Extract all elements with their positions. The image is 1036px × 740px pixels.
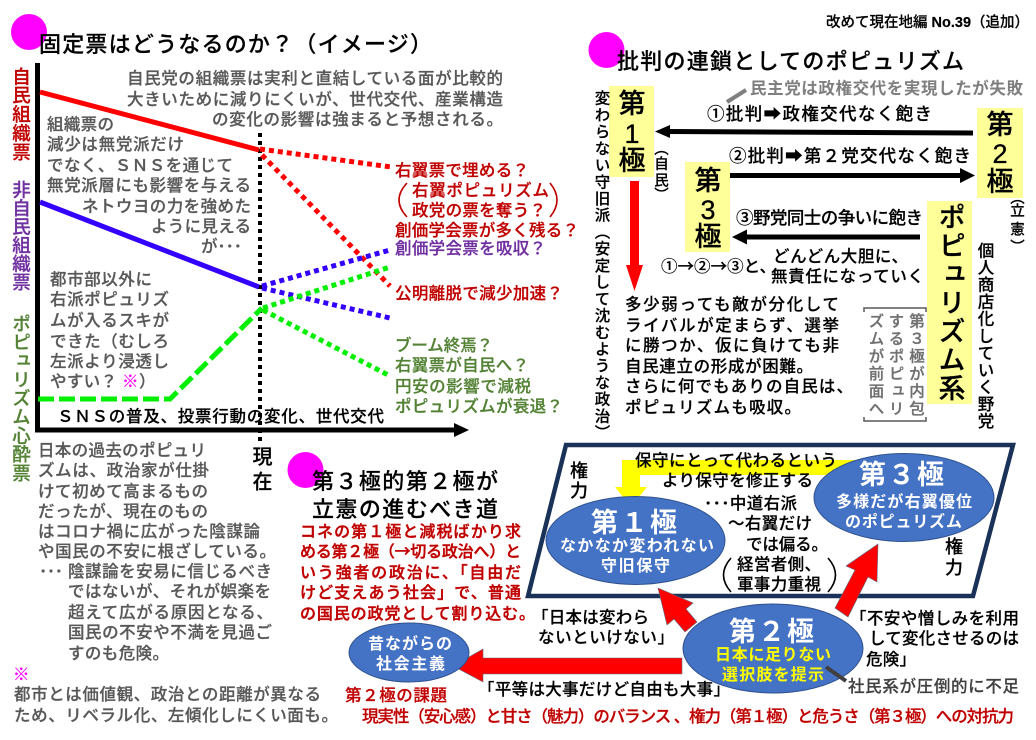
text: urban populism note: ） [139,372,156,391]
text: strategy in red: いう強者の政治に、「自由だ [300,564,521,582]
text: past populism in Japan: すのも危険。 [68,644,169,663]
panel: chain of criticism [588,14,1029,440]
note: third pole populism in bracket: ズムが前面へ [866,313,884,416]
text: strategy in red: める第２極（→切る政治へ）と [300,538,521,562]
box: second pole: 第 [986,110,1014,140]
note: third pole populism in bracket [864,308,926,421]
labels: red line scenarios: 右翼ポピュリズム [412,180,549,200]
text: center right note: ～右翼だけ [728,514,812,533]
text: center right note: 軍事力重視 [737,575,822,594]
text: first pole advantage [625,294,853,417]
quote: do not exploit anxiety: 危険」 [866,650,916,669]
text: decline of organised vote: ように見える [151,217,251,236]
text: urban populism note: 左派より浸透し [50,352,169,371]
box: third pole: 極 [694,222,722,252]
labels: green line scenarios: 円安の影響で減税 [395,377,532,396]
quote: Japan must change: 「日本は変わら [532,608,649,627]
ellipse: second pole: 日本に足りない [715,646,831,664]
text: challenges detail: 現実性（安心感）と甘さ（魅力）のバランス 、権力（第１極）と危うさ（第３極）への対抗力 [362,707,1014,726]
text: past populism in Japan: ･･･ [39,563,63,581]
box: second pole: 極 [986,167,1014,197]
label: absorb Soka vote: 創価学会票を吸収？ [395,239,546,258]
footnote: urban values: 都市とは価値観、政治との距離が異なる [14,684,321,704]
text: decline of organised vote: 無党派層にも影響を与える [47,176,251,195]
footnote: urban values: ※ [13,666,30,684]
text: past populism in Japan: ズムは、政治家が仕掛 [38,460,210,480]
annotation: lack of social democrats: 社民系が圧倒的に不足 [848,676,1019,696]
text: urban populism note: 右派ポピュリズ [50,289,169,309]
ellipse: second pole: 第２極 [729,617,814,647]
footnote: urban values: ため、リベラル化、左傾化しにくい面も。 [14,706,338,725]
text: urban populism note: やすい？ [50,372,117,391]
text: escalation: ①→②→③と、 [661,253,776,277]
ellipse: third pole: のポピュリズム [845,512,962,531]
ellipse: first pole [546,496,725,584]
text: first pole advantage: 自民連立の形成が困難。 [625,356,813,376]
box: third pole: 第 [694,166,722,196]
chart: lines and axes [35,63,469,445]
text: first pole advantage: ポピュリズムも吸収。 [625,397,801,417]
arrow: second pole to old socialism [453,649,682,682]
box: second pole: 2 [992,139,1008,169]
header note: series number: 改めて現在地編 No.39（追加） [826,14,1029,31]
labels: red line scenarios: 創価学会票が多く残る？ [395,220,579,240]
ellipse: third pole: 多様だが右翼優位 [836,492,972,511]
box: first pole [609,86,654,177]
vertical text: LDP: 自民 [652,156,668,187]
arrow 3: populists to third pole [732,208,923,244]
text: axis caption: ＳＮＳの普及、投票行動の変化、世代交代 [57,407,384,426]
text: decline of organised vote: でなく、ＳＮＳを通じて [47,156,233,175]
text: past populism in Japan: 国民の不安や不満を見過ご [68,623,272,642]
title: path for CDP [312,469,498,522]
diagram: power parallelogram [528,445,1013,596]
labels: red line scenarios: 右翼票で埋める？ [395,161,529,180]
label: power left: 権力 [568,461,588,499]
label: power right: 権力 [943,537,963,576]
text: LDP organised vote note [127,68,503,129]
labels: green line scenarios: 右翼票が自民へ？ [395,355,529,375]
labels: green line scenarios [395,335,563,416]
arrow: second pole to third pole [835,544,878,617]
text: LDP organised vote note: 自民党の組織票は実利と直結している面が比較的 [127,68,503,88]
text: first pole advantage: 多少弱っても敵が分化して [625,294,839,314]
label: now: 現在 [249,446,272,491]
title: populism as chain of criticism: 批判の連鎖としてのポピュリズム [617,49,964,74]
vertical text: CDP: （ [1008,190,1024,205]
ellipse: first pole: 第１極 [591,508,677,538]
text: correction from conservatives: より保守を修正する [662,471,813,490]
marker: section 2 circle [588,32,624,68]
box: third pole [685,162,730,252]
quote: Japan must change: ないといけない」 [538,628,674,647]
vertical text: LDP: ） [652,187,668,202]
labels: green line scenarios: ブーム終焉？ [395,335,493,355]
arrow 1: second pole to first pole [655,104,973,138]
text: escalation: 無責任になっていく [771,267,924,286]
text: first pole advantage: さらに何でもありの自民は、 [625,377,853,396]
labels: red line scenarios: 政党の票を奪う？ [412,201,546,220]
ellipse: third pole: 第３極 [859,460,944,490]
text: past populism in Japan: 超えて広がる原因となる、 [68,602,273,622]
quote: equality and freedom: 「平等は大事だけど自由も大事」 [478,680,730,699]
box: populist group: ポピュリズム系 [934,203,965,401]
text: first pole advantage: に勝つか、仮に負けても非 [625,336,839,355]
quote: do not exploit anxiety: 「不安や憎しみを利用 [850,609,1019,628]
arrow 2: third pole to second pole: ②批判➡第２党交代なく飽き [729,146,971,166]
vertical text: LDP: （ [652,141,668,156]
ellipse: old socialism [349,623,469,682]
text: decline of organised vote: ネトウヨの力を強めた [82,197,251,216]
text: past populism in Japan: 日本の過去のポピュリ [38,441,206,460]
vertical text: LDP [652,141,668,202]
text: urban populism note: 都市部以外に [50,270,152,289]
frame: parallelogram [528,445,1013,596]
quote: do not exploit anxiety [850,609,1019,669]
box: second pole [977,108,1023,198]
heading: second pole challenges: 第２極の課題 [345,686,448,705]
vertical text: CDP: 立憲 [1008,203,1024,236]
axis label: populism supporters: ポピュリズム心酔票 [10,314,32,482]
arrow 3: populists to third pole: ③野党同士の争いに飽き [736,208,923,228]
title: path for CDP: 第３極的第２極が [312,469,498,494]
arrow: first pole sinking [626,181,643,291]
vertical text: CDP: ） [1008,239,1024,254]
text: decline of organised vote: 組織票の [47,115,114,134]
box: first pole: 1 [624,119,640,149]
ellipse: first pole: 守旧保守 [601,557,670,575]
title: path for CDP: 立憲の進むべき道 [312,497,498,522]
text: past populism in Japan: けて初めて高まるもの [38,482,208,501]
annotation: lack of social democrats [826,667,1019,696]
text: first pole advantage: ライバルが定まらず、選挙 [625,315,840,335]
text: urban populism note: できた（むしろ [50,332,169,351]
ellipse: first pole: なかなか変われない [560,536,714,555]
text: urban populism note: ※ [122,373,138,391]
box: third pole: 3 [700,195,716,225]
ellipse: second pole [683,604,863,693]
panel: path for CDP [288,452,535,623]
quote: do not exploit anxiety: して変化させるのは [869,629,1019,648]
text: past populism in Japan: や国民の不安に根ざしている。 [38,541,276,561]
quote: Japan must change [532,608,674,647]
label: Komeito departure: 公明離脱で減少加速？ [395,284,563,303]
text: center right note [704,494,836,594]
vertical text: shopkeeper opposition: 個人商店化していく野党 [975,242,994,429]
axis label: LDP organised vote: 自民組織票 [10,67,32,161]
text: past populism in Japan: ではないが、それが娯楽を [68,581,271,601]
arrow 2: third pole to second pole [729,146,975,183]
text: past populism in Japan [38,441,276,663]
annotation: DPJ failure [727,78,1024,102]
arrow: yellow correction arrow [615,460,860,507]
text: strategy in red: コネの第１極と減税ばかり求 [300,523,521,541]
ellipse: second pole: 選択肢を提示 [722,665,824,684]
labels: green line scenarios: ポピュリズムが衰退？ [395,396,563,416]
text: past populism in Japan: 陰謀論を安易に信じるべき [68,562,272,581]
text: strategy in red [300,523,535,623]
text: LDP organised vote note: 大きいために減りにくいが、世代交代、産業構造 [127,89,503,109]
text: escalation: どんどん大胆に、 [773,247,908,266]
ellipse: third pole [814,454,994,542]
text: decline of organised vote [47,115,251,256]
vertical text: stagnant conservatism: 変わらない守旧派（安定して沈むような政治） [592,90,610,440]
text: strategy in red: けど支えあう社会」で、普通 [300,584,521,602]
text: urban populism note: ムが入るスキが [50,310,170,330]
text: correction from conservatives [635,451,837,490]
text: strategy in red: の国民の政党として割り込む。 [300,605,535,623]
footnote: urban values [13,666,338,725]
text: decline of organised vote: が･･･ [201,236,242,256]
ellipse: old socialism: 昔ながらの [368,634,452,653]
panel: fixed vote chart [10,14,579,491]
box: populist group [927,201,972,404]
text: LDP organised vote note: の変化の影響は強まると予想される。 [212,110,503,129]
annotation: DPJ failure: 民主党は政権交代を実現したが失敗 [750,78,1024,98]
marker: section 1 circle [11,14,47,50]
labels: red line scenarios [395,161,579,240]
vertical text: CDP [1008,190,1024,254]
text: escalation [661,247,924,286]
text: decline of organised vote: 減少は無党派だけ [47,135,184,154]
ellipse: old socialism: 社会主義 [376,654,445,673]
axis label: non LDP organised vote: 非自民組織票 [10,180,32,291]
note: third pole populism in bracket: 第３極が内包 [907,313,925,416]
text: center right note: ･･･中道右派 [704,494,798,513]
box: first pole: 極 [618,146,646,176]
text: past populism in Japan: はコロナ禍に広がった陰謀論 [38,521,260,541]
note: third pole populism in bracket: するポピュリ [886,313,904,416]
title: fixed votes: 固定票はどうなるのか？（イメージ） [39,32,432,57]
box: first pole: 第 [618,89,646,119]
arrow: second pole to first pole [658,588,697,632]
marker: section 3 circle [288,452,324,488]
text: correction from conservatives: 保守にとって代わるという [635,451,837,470]
text: center right note: 経営者側、 [737,555,821,574]
text: center right note: では偏る。 [746,535,828,554]
arrow 1: second pole to first pole: ①批判➡政権交代なく飽き [707,104,932,124]
text: past populism in Japan: だったが、現在のもの [38,501,208,521]
text: urban populism note [50,270,170,391]
